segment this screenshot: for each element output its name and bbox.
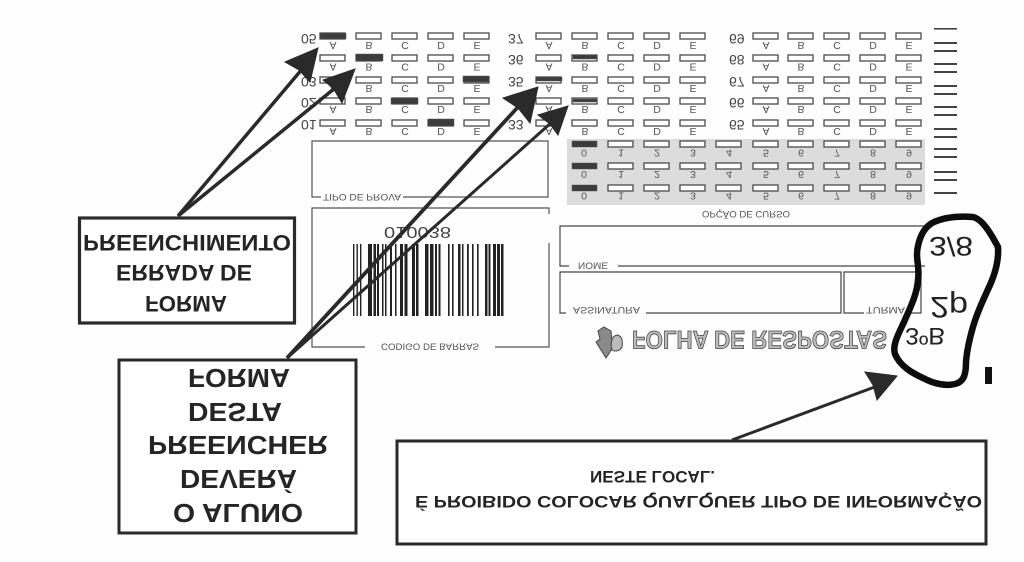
question numbers: 69	[729, 31, 745, 47]
question numbers: 36	[508, 52, 524, 68]
question numbers: 37	[508, 31, 524, 47]
label: ASSINATURA	[573, 304, 641, 315]
arrow: wrong fill to bubble row 2	[178, 69, 355, 216]
barcode	[353, 244, 504, 316]
filled answer marks	[320, 33, 597, 126]
arrow: correct fill to row 34	[287, 106, 568, 358]
arrow: correct fill to row 35	[287, 87, 538, 358]
callout text: FORMA	[145, 291, 227, 316]
callout text: DESTA	[188, 397, 282, 425]
answer letters: ABCDEABCDEABCDE	[329, 125, 913, 137]
box outline	[844, 272, 921, 313]
label: NOME	[578, 260, 608, 270]
box outline	[560, 272, 841, 313]
question numbers: 65	[729, 117, 745, 133]
callout text	[415, 467, 982, 512]
answer bubbles	[320, 33, 921, 126]
box outline	[312, 208, 549, 347]
answer letters: ABCDEABCDEABCDE	[329, 103, 913, 115]
digit labels: 0123456789	[581, 190, 912, 202]
callout: forma correta	[119, 360, 356, 533]
callout text: FORMA	[188, 363, 290, 391]
small black mark	[985, 367, 992, 384]
callout text: NESTE LOCAL.	[590, 467, 715, 486]
handwriting: 3/8: 3/8	[929, 231, 973, 261]
sheet title: FOLHA DE RESPOSTAS	[632, 325, 887, 353]
digit bubbles	[608, 141, 921, 191]
panel: course option grid	[567, 139, 925, 219]
callout text: PREENCHER	[148, 430, 328, 458]
question numbers: 05	[301, 31, 317, 47]
icon: logo	[596, 327, 622, 358]
digit labels	[581, 146, 912, 202]
digit labels: 0123456789	[581, 168, 912, 180]
callout box	[397, 441, 986, 544]
answer letters: ABCDEABCDEABCDE	[329, 39, 913, 51]
barcode number: 010038	[384, 223, 451, 240]
callout text	[148, 363, 328, 526]
hand-drawn circle	[894, 217, 998, 385]
label: TURMA	[866, 304, 906, 315]
callout text: ERRADA DE	[116, 260, 252, 285]
arrow: wrong fill to bubble 05	[178, 48, 318, 216]
callout text: PREENCHIMENTO	[83, 230, 291, 255]
panel: answer grid	[301, 31, 921, 137]
callout text: É PROIBIDO COLOCAR QUALQUER TIPO DE INFORMAÇÃO	[415, 492, 982, 512]
question numbers: 68	[729, 52, 745, 68]
callout: local proibido	[397, 441, 986, 544]
callout box	[80, 218, 294, 323]
label: CODIGO DE BARRAS	[381, 340, 479, 352]
box outline	[560, 226, 925, 266]
arrow: to forbidden area	[732, 372, 897, 440]
answer letters	[329, 39, 913, 137]
question numbers: 33	[508, 117, 524, 133]
handwriting: 2b: 2p	[930, 290, 968, 323]
panel: turma field	[844, 272, 921, 315]
digit labels: 0123456789	[581, 146, 912, 158]
label: TIPO DE PROVA	[323, 191, 402, 202]
question numbers: 35	[508, 74, 524, 90]
handwriting: 3ºB: 3ºB	[905, 322, 945, 349]
grey background	[567, 139, 925, 205]
course option label: OPÇÃO DE CURSO	[702, 208, 790, 219]
panel: tipo de prova	[312, 141, 548, 202]
callout: forma errada	[80, 218, 294, 323]
panel: assinatura field	[560, 272, 841, 315]
question numbers: 02	[301, 95, 317, 111]
panel: codigo de barras	[312, 208, 549, 352]
callout box	[119, 360, 356, 533]
answer letters: ABCDEABCDEABCDE	[329, 60, 913, 72]
question numbers	[301, 31, 745, 133]
question numbers: 67	[729, 74, 745, 90]
question numbers: 66	[729, 95, 745, 111]
question numbers: 03	[301, 74, 317, 90]
callout text: DEVERÁ	[180, 464, 297, 493]
answer letters: ABCDEABCDEABCDE	[329, 82, 913, 94]
box outline	[312, 141, 548, 197]
filled zero marks	[572, 141, 597, 191]
callout text: O ALUNO	[173, 498, 303, 526]
question numbers: 01	[301, 117, 317, 133]
panel: nome field	[560, 226, 925, 270]
callout text	[83, 230, 291, 316]
timing marks	[934, 28, 957, 194]
